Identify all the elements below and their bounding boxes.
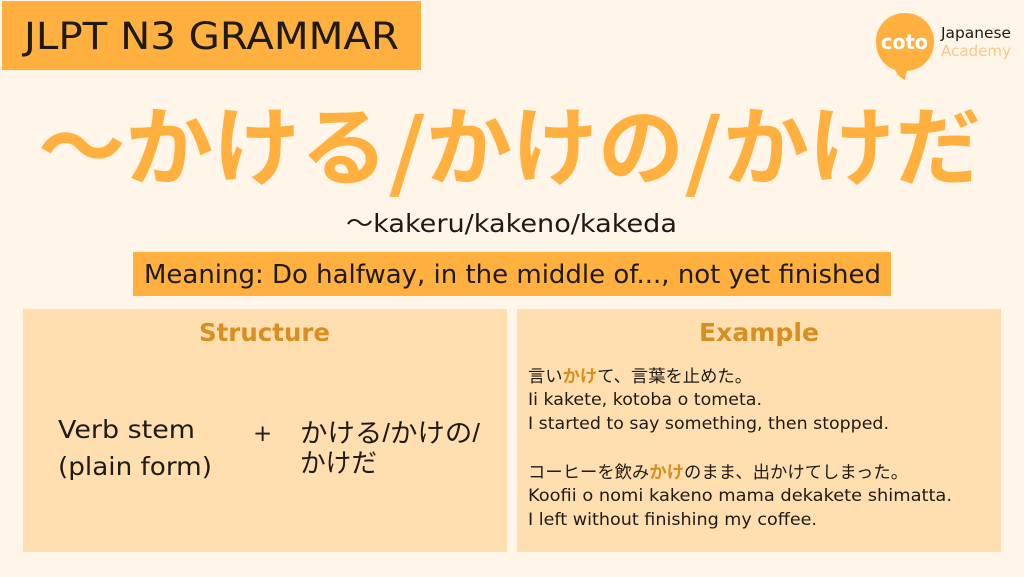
main heading: grammar pattern: かけだ (723, 101, 981, 197)
meaning banner: Meaning: Do halfway, in the middle of..., not yet finished (144, 260, 881, 290)
example 1 japanese: 言いかけて、言葉を止めた。 (528, 366, 752, 386)
plain form label: (plain form) (58, 452, 212, 481)
main heading: grammar pattern: ～かける (38, 101, 388, 197)
pattern second line: かけだ (300, 448, 377, 478)
main heading: grammar pattern: / (390, 94, 424, 211)
main heading: grammar pattern: かけの (426, 101, 684, 197)
logo: coto Japanese Academy: coto (881, 30, 928, 54)
main heading: grammar pattern (38, 94, 981, 211)
example heading: Example (699, 318, 819, 347)
verb stem label: Verb stem (58, 415, 195, 444)
meaning banner (133, 252, 891, 296)
structure heading: Structure (199, 318, 330, 347)
panel: example (517, 309, 1001, 552)
logo: coto Japanese Academy: Academy (941, 42, 1011, 60)
panel: structure (23, 309, 507, 552)
title tag: JLPT N3 GRAMMAR (2, 1, 421, 70)
logo: coto Japanese Academy: Japanese (940, 24, 1011, 42)
main heading: grammar pattern: / (686, 94, 720, 211)
example 2 japanese: コーヒーを飲みかけのまま、出かけてしまった。 (528, 462, 908, 482)
romaji reading: ～kakeru/kakeno/kakeda (346, 209, 677, 238)
example 1 romaji: Ii kakete, kotoba o tometa. (528, 390, 762, 410)
logo: coto Japanese Academy (876, 13, 1011, 80)
plus sign: + (253, 421, 272, 447)
example 1 english: I started to say something, then stopped. (528, 414, 889, 434)
example 2 romaji: Koofii o nomi kakeno mama dekakete shimatta. (528, 486, 952, 506)
title tag: JLPT N3 GRAMMAR: JLPT N3 GRAMMAR (22, 15, 399, 58)
pattern first line: かける/かけの/ (300, 418, 481, 448)
example 2 english: I left without finishing my coffee. (528, 510, 817, 530)
